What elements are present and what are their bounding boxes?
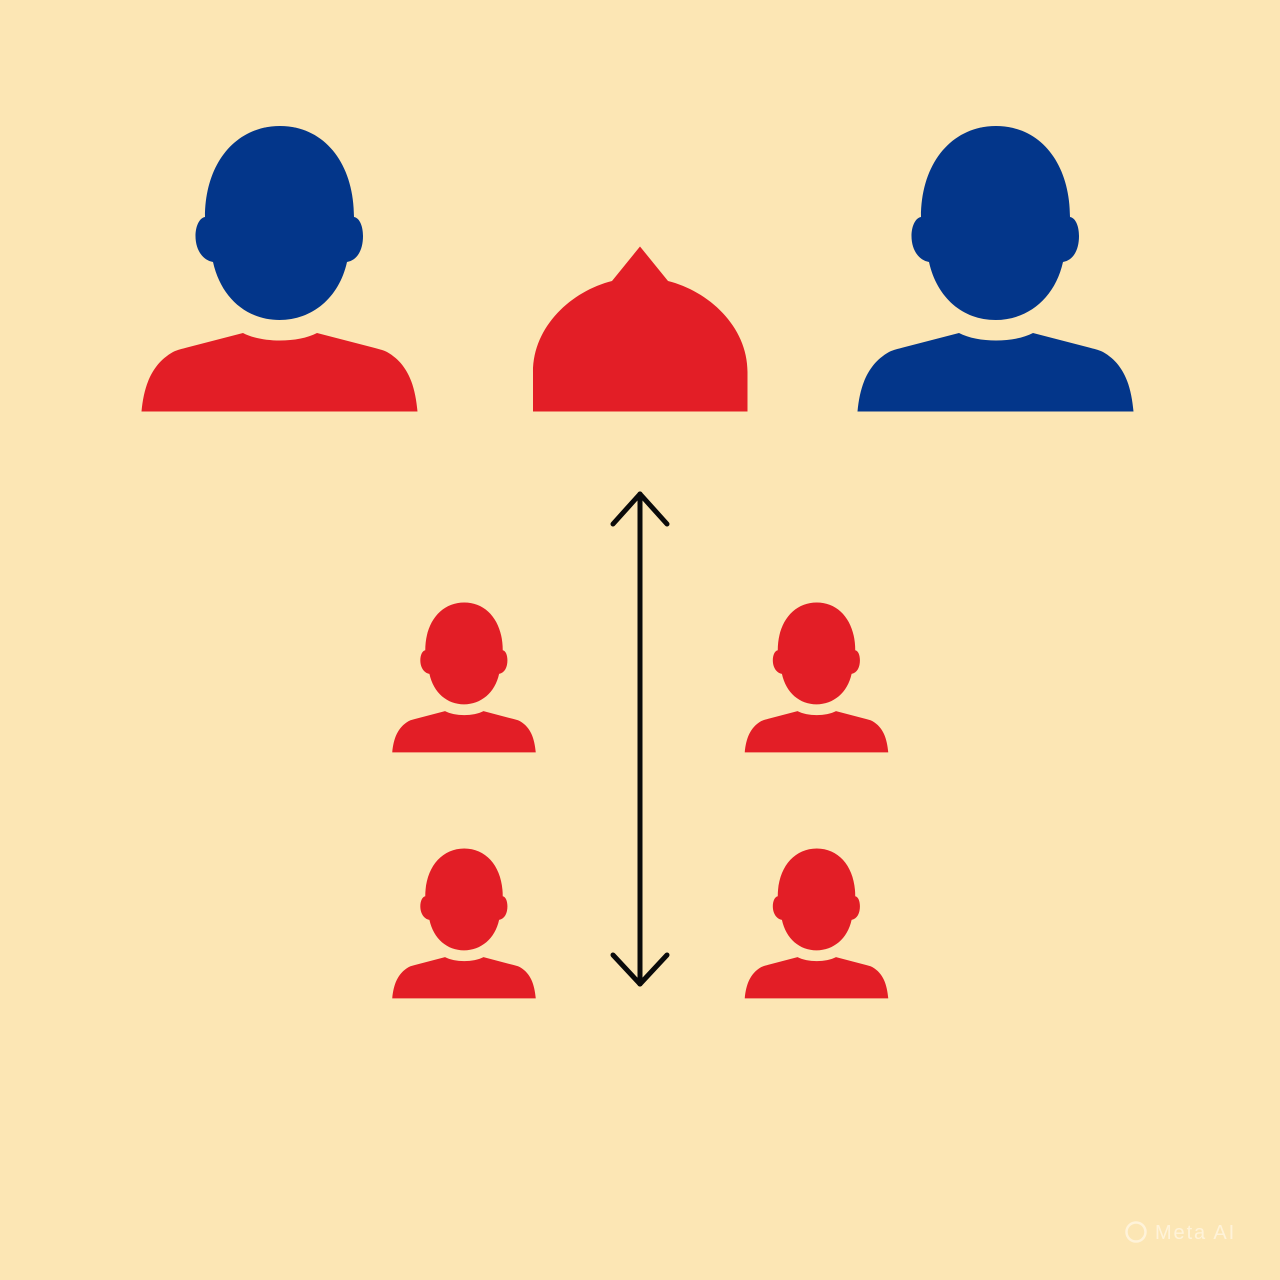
- central red dome shape: [533, 246, 748, 412]
- small person: top right: [745, 602, 888, 752]
- small person: bottom left: [392, 848, 536, 998]
- person: right, all blue: [858, 126, 1134, 412]
- watermark: Meta AI: Meta AI: [1155, 1222, 1236, 1244]
- double-headed vertical arrow: [613, 494, 667, 984]
- person: left, blue head and red body: [142, 126, 418, 412]
- small person: top left: [392, 602, 536, 752]
- small person: bottom right: [745, 848, 888, 998]
